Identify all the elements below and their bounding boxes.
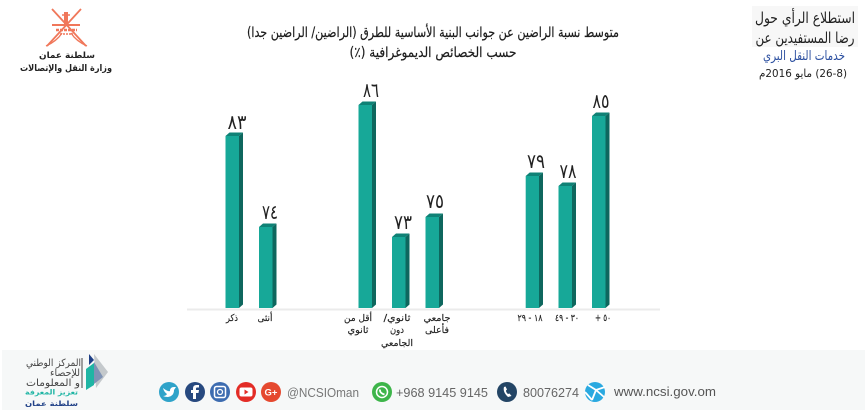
- icon: twitter: [159, 382, 179, 402]
- bar group: education: فأعلى: [425, 323, 449, 336]
- logo: Ministry of Transport: [20, 9, 112, 74]
- bar group: education: ٧٥: [426, 189, 444, 213]
- bar group: education: الجامعي: [381, 338, 413, 349]
- title: [247, 23, 619, 61]
- survey heading block: خدمات النقل البري: [763, 49, 845, 64]
- bar group: age: ٧٩: [527, 149, 545, 173]
- logo: NCSI: سلطنة عمان: [25, 400, 78, 408]
- survey heading block: (26-8) مايو 2016م: [759, 67, 847, 80]
- bar group: age: ٨٥: [592, 89, 610, 113]
- bar group: education: ٨٦: [363, 78, 379, 102]
- bar group: gender: [225, 110, 278, 324]
- bar group: education: دون: [390, 325, 404, 336]
- whatsapp number: +968 9145 9145: [396, 385, 488, 400]
- icon: web globe: [585, 382, 605, 402]
- logo: NCSI: للإحصاء: [50, 368, 80, 379]
- bar group: age: ٣٠ - ٤٩: [555, 313, 579, 324]
- bar group: education: أقل من: [344, 311, 372, 324]
- icon: youtube: [236, 382, 256, 402]
- logo: NCSI: [25, 354, 108, 408]
- website: www.ncsi.gov.om: [613, 384, 716, 399]
- survey heading block: [752, 6, 858, 80]
- ministry name: سلطنة عمان: [39, 51, 95, 61]
- bar group: education: ثانوي/: [384, 313, 411, 324]
- bar group: gender: ٨٣: [228, 110, 247, 134]
- bar group: age: ٥٠ +: [595, 313, 611, 324]
- icon: phone: [497, 382, 517, 402]
- social handle: @NCSIOman: [287, 385, 359, 400]
- logo: NCSI: تعزيز المعرفة: [25, 388, 78, 396]
- bar group: age: ٧٨: [560, 159, 577, 183]
- icon: facebook: [185, 382, 205, 402]
- bar group: gender: ذكر: [225, 313, 238, 324]
- bar group: age: [518, 89, 611, 324]
- title: حسب الخصائص الديموغرافية (٪): [350, 45, 516, 61]
- icon: instagram: [210, 382, 230, 402]
- icon: whatsapp: [372, 382, 392, 402]
- bar group: education: ٧٣: [394, 210, 412, 234]
- phone number: 80076274: [523, 385, 579, 400]
- icon: national emblem: [46, 9, 87, 46]
- icon: google plus: G+: [265, 388, 278, 398]
- footer band: [2, 350, 865, 410]
- ministry name: [20, 51, 112, 74]
- logo: NCSI: و المعلومات: [26, 378, 80, 389]
- logo: NCSI: المركز الوطني: [26, 358, 81, 369]
- bar group: age: ١٨ - ٢٩: [518, 313, 542, 324]
- bar group: education: [344, 78, 451, 349]
- bar group: education: ثانوي: [348, 325, 369, 336]
- bar chart: [187, 78, 660, 349]
- title: متوسط نسبة الراضين عن جوانب البنية الأساسية للطرق (الراضين/ الراضين جدا): [247, 23, 619, 41]
- ministry name: وزارة النقل والإتصالات: [20, 64, 112, 74]
- bar group: gender: ٧٤: [262, 200, 278, 224]
- icon: google plus: [261, 382, 281, 402]
- bar group: education: جامعي: [424, 313, 451, 324]
- bar group: gender: أنثى: [258, 311, 273, 324]
